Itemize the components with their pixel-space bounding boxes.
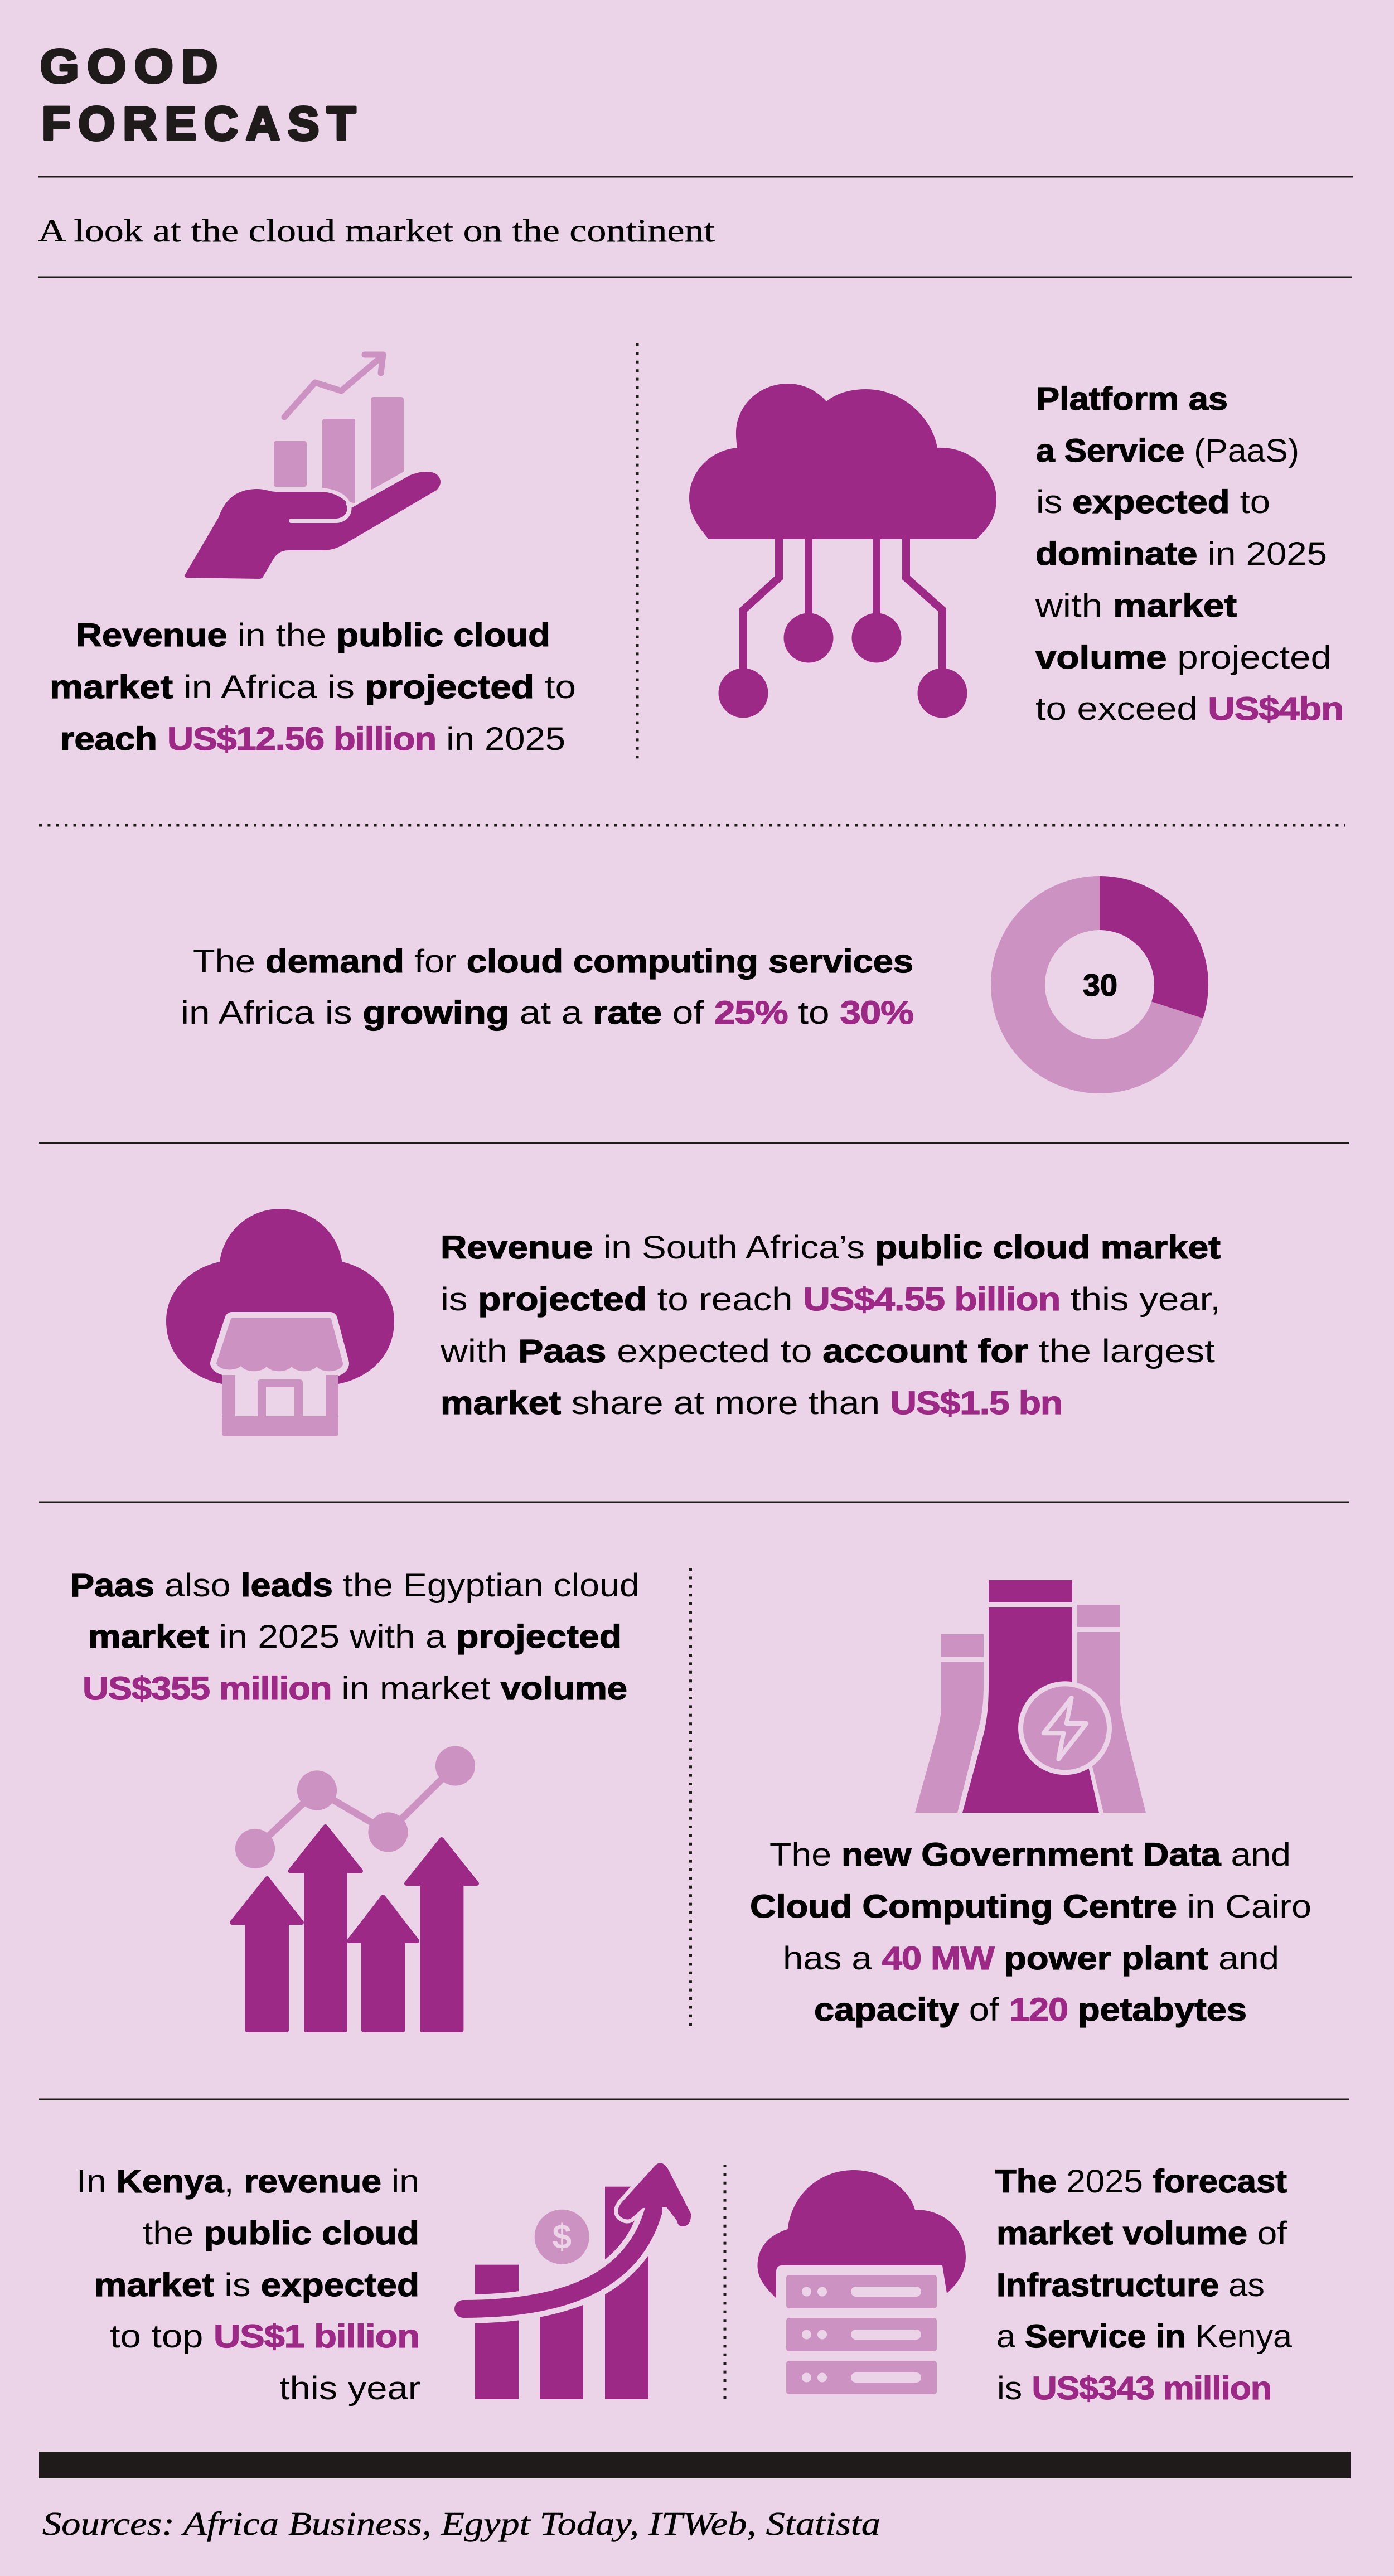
text: Kenya revenue: In Kenya , revenue in (76, 2163, 419, 2200)
text: Egypt PaaS: market in 2025 with a projected (88, 1619, 622, 1655)
text: South Africa revenue (440, 1229, 1221, 1421)
text: Cairo data centre: The new Government Data and (769, 1837, 1291, 1873)
text: revenue in Africa (50, 617, 576, 757)
subtitle: A look at the cloud market on the continent (38, 212, 715, 249)
title (40, 40, 364, 149)
text: Kenya revenue (76, 2163, 420, 2406)
text: platform as a service: a Service (PaaS) (1036, 433, 1299, 469)
footer black bar (39, 2452, 1351, 2478)
text: demand growth rate (181, 943, 913, 1031)
text: South Africa revenue: with Paas expected to account for the largest (440, 1333, 1215, 1369)
text: platform as a service: with market (1035, 588, 1237, 624)
text: Cairo data centre: Cloud Computing Centre in Cairo (750, 1889, 1311, 1925)
text: Cairo data centre: has a 40 MW power plant and (783, 1940, 1279, 1977)
text: platform as a service: to exceed US$4bn (1035, 691, 1343, 727)
text: Kenya infrastructure: market volume of (996, 2215, 1287, 2251)
text: Kenya infrastructure: a Service in Kenya (996, 2318, 1293, 2355)
text: demand growth rate: The demand for cloud computing services (193, 943, 913, 980)
text: South Africa revenue: is projected to reach US$4.55 billion this year, (441, 1281, 1221, 1318)
icon: hand holding rising bar chart (185, 355, 441, 579)
title: GOOD (40, 40, 226, 93)
donut chart: 30 (1018, 876, 1208, 1066)
text: revenue in Africa: Revenue in the public cloud (76, 617, 550, 653)
text: Kenya infrastructure: The 2025 forecast (995, 2163, 1287, 2200)
icon: cloud with storefront (166, 1209, 394, 1436)
text: Cairo data centre (750, 1837, 1311, 2028)
text: Kenya revenue: this year (279, 2370, 420, 2406)
text: South Africa revenue: market share at more than US$1.5 bn (441, 1385, 1062, 1421)
text: revenue in Africa: market in Africa is projected to (50, 669, 576, 705)
text: platform as a service: Platform as (1036, 381, 1228, 417)
icon: power plant cooling towers (915, 1580, 1146, 1813)
text: Egypt PaaS (70, 1567, 640, 1707)
icon: bars with coin and curved arrow (463, 2163, 691, 2399)
icon: rising arrows with line chart (232, 1746, 477, 2030)
text: Kenya infrastructure: Infrastructure as (996, 2267, 1265, 2303)
text: Kenya infrastructure: is US$343 million (997, 2370, 1271, 2406)
text: Kenya revenue: to top US$1 billion (110, 2318, 419, 2355)
title: FORECAST (42, 97, 364, 149)
text: Egypt PaaS: US$355 million in market volume (83, 1670, 627, 1707)
icon: cloud with server rack (757, 2170, 966, 2394)
text: Kenya infrastructure (995, 2163, 1293, 2406)
text: platform as a service: volume projected (1035, 640, 1332, 676)
icon: bars with coin and curved arrow: $ (552, 2218, 572, 2257)
text: Kenya revenue: market is expected (94, 2267, 419, 2303)
text: platform as a service (1035, 381, 1343, 727)
donut chart: 30: 30 (1083, 967, 1117, 1003)
text: Kenya revenue: the public cloud (143, 2215, 419, 2251)
text: revenue in Africa: reach US$12.56 billion in 2025 (60, 721, 565, 757)
text: platform as a service: dominate in 2025 (1035, 536, 1327, 572)
text: Egypt PaaS: Paas also leads the Egyptian cloud (70, 1567, 640, 1604)
text: Cairo data centre: capacity of 120 petabytes (814, 1992, 1247, 2028)
sources: Sources: Africa Business, Egypt Today, ITWeb, Statista (42, 2505, 880, 2542)
text: platform as a service: is expected to (1036, 484, 1270, 520)
icon: cloud with circuit nodes (689, 384, 996, 718)
text: demand growth rate: in Africa is growing at a rate of 25% to 30% (181, 995, 913, 1031)
text: South Africa revenue: Revenue in South Africa’s public cloud market (441, 1229, 1221, 1266)
